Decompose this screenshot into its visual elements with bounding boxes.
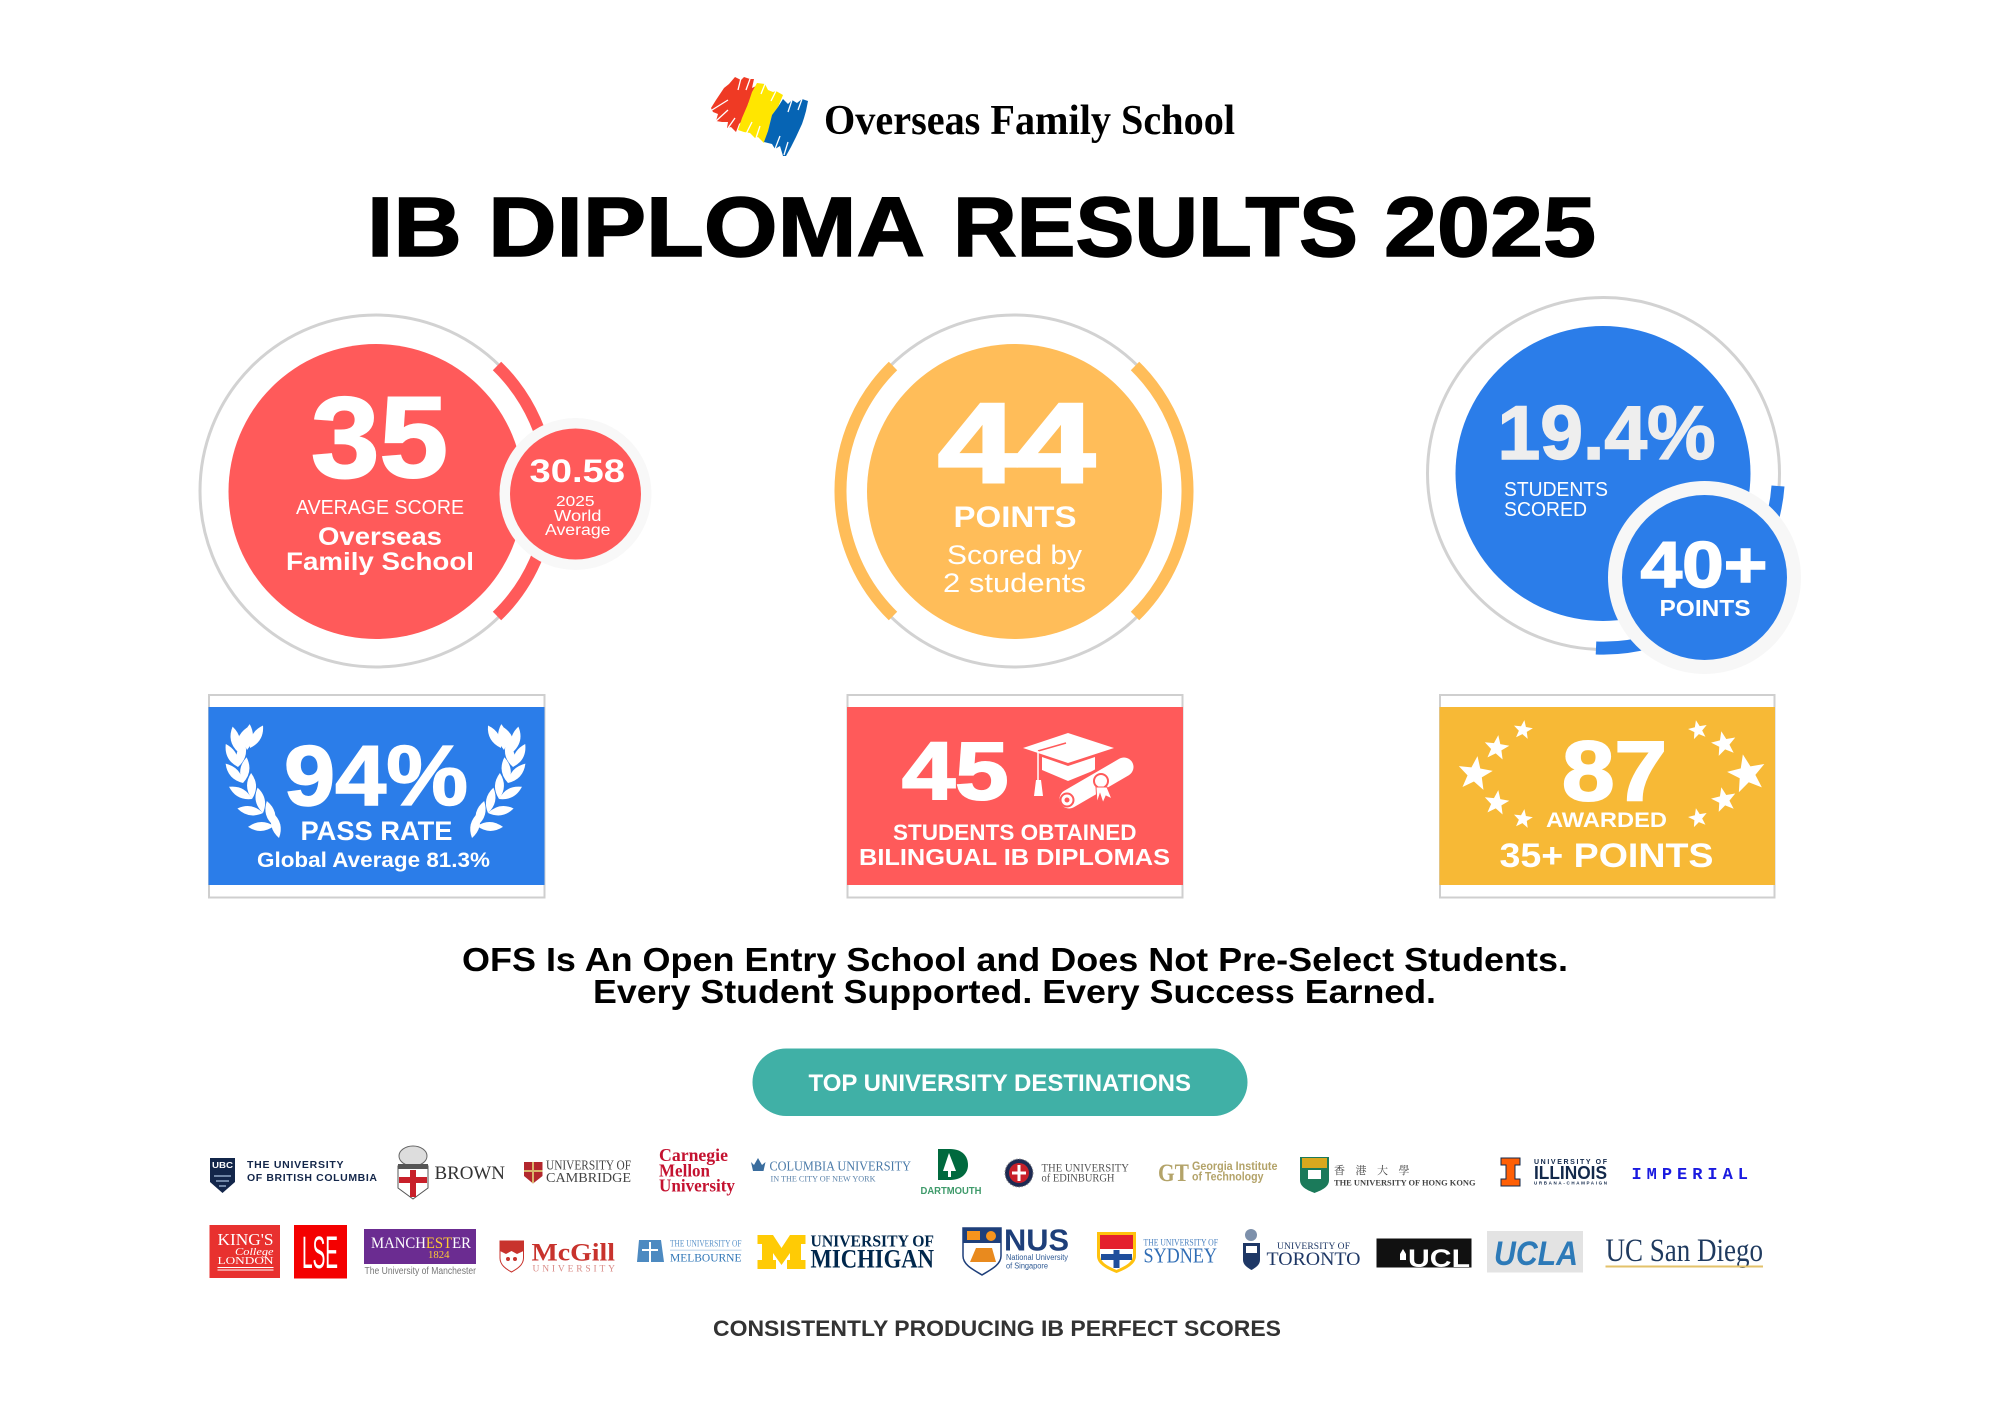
value: 44: 44: [938, 380, 1095, 506]
logo: McGill: [500, 1240, 615, 1274]
caption: students scored: SCORED: [1504, 499, 1587, 521]
badge: world average: 2025: [556, 493, 594, 510]
school label: Overseas: [318, 523, 442, 551]
logo: Toronto: UNIVERSITY OF: [1277, 1242, 1350, 1252]
logo: Columbia: [751, 1158, 911, 1184]
logo: Sydney: SYDNEY: [1144, 1244, 1217, 1268]
logo: Toronto: [1243, 1229, 1360, 1270]
logo: Cambridge: CAMBRIDGE: [546, 1171, 631, 1186]
icon: left laurel: [222, 723, 283, 839]
logo: Edinburgh: of EDINBURGH: [1042, 1170, 1115, 1184]
school logo: [711, 77, 1235, 156]
caption: scored by 2 students: [943, 540, 1086, 598]
icon: graduation cap and scroll: [1023, 733, 1124, 806]
logo: NUS: of Singapore: [1006, 1262, 1049, 1270]
value: 35: 35: [311, 374, 448, 502]
caption: scored by 2 students: Scored by: [947, 540, 1083, 570]
logo: Melbourne: [637, 1238, 742, 1264]
logo: UBC: THE UNIVERSITY: [247, 1159, 344, 1171]
logo: Edinburgh: [1005, 1159, 1129, 1187]
title: [367, 180, 1596, 274]
logo: NUS: [963, 1222, 1069, 1275]
panel: top score: [838, 315, 1190, 667]
badge: world average: [500, 418, 652, 570]
logo: Melbourne: MELBOURNE: [670, 1250, 742, 1264]
value: 19.4%: 19.4%: [1498, 391, 1716, 476]
logo: University of Hong Kong: [1300, 1157, 1476, 1193]
logo: Georgia Tech: [1158, 1160, 1278, 1187]
logo: UCLA: UCLA: [1494, 1235, 1578, 1273]
logo: Carnegie Mellon: University: [659, 1176, 735, 1196]
logo: UCL: [1376, 1238, 1472, 1273]
logo: Illinois: UNIVERSITY OF: [1534, 1159, 1608, 1166]
logo: Manchester: MANCHESTER: [371, 1235, 471, 1252]
logo: Cambridge: [524, 1158, 631, 1186]
value: 94%: 94%: [284, 729, 468, 824]
caption: bilingual diplomas: STUDENTS OBTAINED: [893, 820, 1136, 845]
card: pass rate: [208, 695, 544, 898]
logo: Imperial: IMPERIAL: [1632, 1166, 1748, 1185]
logo: UBC: UBC: [212, 1160, 233, 1170]
icon: stars: [1456, 718, 1769, 828]
value: 45: 45: [902, 726, 1008, 817]
caption: bilingual diplomas: BILINGUAL IB DIPLOMAS: [859, 844, 1170, 870]
logo: Edinburgh: THE UNIVERSITY: [1042, 1160, 1129, 1174]
title: 2025: [1384, 180, 1596, 274]
logo: Toronto: TORONTO: [1266, 1249, 1360, 1270]
logo: Melbourne: THE UNIVERSITY OF: [670, 1238, 742, 1248]
badge: 40+ points: 40+: [1640, 528, 1768, 601]
caption: points: POINTS: [954, 501, 1076, 534]
caption: scored by 2 students: 2 students: [943, 568, 1086, 598]
logo: Dartmouth: DARTMOUTH: [920, 1185, 982, 1197]
caption: awarded: AWARDED: [1546, 809, 1667, 832]
logo: Georgia Tech: Georgia Institute: [1192, 1161, 1278, 1173]
card: 35+ points: [1440, 695, 1775, 898]
logo: Illinois: URBANA-CHAMPAIGN: [1534, 1180, 1607, 1186]
value: 87: 87: [1562, 724, 1667, 818]
logo: Michigan: UNIVERSITY OF: [810, 1232, 934, 1250]
logo: Cambridge: UNIVERSITY OF: [546, 1158, 631, 1172]
badge: world average: World: [554, 508, 602, 525]
logo: Carnegie Mellon: [659, 1145, 735, 1196]
logo: Michigan: [758, 1232, 934, 1274]
panel: students scoring 40+: [1428, 298, 1801, 674]
logo: University of Hong Kong: THE UNIVERSITY OF HONG KONG: [1334, 1178, 1476, 1188]
logo: Columbia: IN THE CITY OF NEW YORK: [770, 1174, 876, 1184]
title: IB DIPLOMA: [367, 180, 925, 274]
statement: OFS Is An Open Entry School and Does Not Pre-Select Students.: [462, 941, 1568, 978]
statement: Every Student Supported. Every Success Earned.: [593, 973, 1436, 1010]
logo: Georgia Tech: GT: [1158, 1160, 1189, 1187]
logo: McGill: UNIVERSITY: [532, 1264, 615, 1274]
logo: Carnegie Mellon: Carnegie: [659, 1145, 728, 1165]
school label: [286, 523, 474, 576]
caption: students scored: [1504, 479, 1608, 521]
logo: Columbia: COLUMBIA UNIVERSITY: [770, 1158, 911, 1174]
icon: paint brush strokes: [711, 77, 808, 156]
logo: Sydney: THE UNIVERSITY OF: [1144, 1238, 1218, 1248]
footer: perfect scores note: CONSISTENTLY PRODUCING IB PERFECT SCORES: [713, 1316, 1281, 1341]
school label: Family School: [286, 548, 474, 576]
caption: global average: Global Average 81.3%: [257, 849, 490, 872]
badge: world average: Average: [545, 522, 610, 539]
logo: University of Hong Kong: 香港大學: [1334, 1163, 1410, 1177]
logo: UBC: OF BRITISH COLUMBIA: [247, 1172, 377, 1184]
caption: average score: AVERAGE SCORE: [296, 497, 464, 519]
icon: right laurel: [468, 723, 529, 839]
logo: King's College London: KING'S: [218, 1230, 274, 1249]
panel: average score: [200, 315, 652, 667]
logo: Michigan: MICHIGAN: [810, 1244, 934, 1274]
logo: Dartmouth: [920, 1149, 982, 1197]
button: top university destinations: [752, 1048, 1248, 1116]
caption: students scored: STUDENTS: [1504, 479, 1608, 501]
card: bilingual diplomas: [847, 695, 1183, 898]
logo: Georgia Tech: of Technology: [1192, 1172, 1264, 1184]
badge: 40+ points: POINTS: [1660, 595, 1750, 621]
logo: LSE: LSE: [302, 1227, 338, 1278]
logo: UBC: [210, 1158, 377, 1193]
logo: UC San Diego: UC San Diego: [1606, 1233, 1763, 1269]
badge: 40+ points: [1608, 481, 1801, 674]
logo: Brown: BROWN: [434, 1163, 505, 1184]
statement: [462, 941, 1568, 1010]
logo: Brown: [398, 1146, 505, 1199]
logo: LSE: [294, 1225, 347, 1278]
logo: NUS: NUS: [1004, 1222, 1069, 1258]
button: top university destinations: TOP UNIVERSITY DESTINATIONS: [808, 1070, 1191, 1097]
university logos row 2: [210, 1222, 1763, 1278]
caption: 35+ points: 35+ POINTS: [1500, 837, 1714, 875]
logo: Manchester: [364, 1229, 477, 1277]
logo: Sydney: [1097, 1232, 1218, 1273]
logo: UCL: UCL: [1408, 1245, 1470, 1273]
logo: Illinois: ILLINOIS: [1534, 1163, 1607, 1183]
logo: Illinois: [1501, 1158, 1608, 1186]
logo: King's College London: LONDON: [218, 1255, 274, 1267]
logo: Manchester: 1824: [428, 1250, 450, 1261]
logo: McGill: McGill: [532, 1240, 615, 1266]
logo: King's College London: [210, 1225, 280, 1278]
university logos row 1: [210, 1145, 1748, 1199]
title: RESULTS: [953, 180, 1358, 274]
logo: NUS: National University: [1006, 1253, 1068, 1262]
logo: Carnegie Mellon: Mellon: [659, 1160, 710, 1180]
caption: pass rate: PASS RATE: [300, 816, 452, 846]
school name: Overseas Family School: [824, 98, 1235, 144]
caption: bilingual diplomas: [859, 820, 1170, 870]
logo: Manchester: The University of Manchester: [364, 1266, 477, 1277]
badge: world average: 30.58: [530, 453, 625, 489]
logo: King's College London: College: [235, 1246, 274, 1258]
